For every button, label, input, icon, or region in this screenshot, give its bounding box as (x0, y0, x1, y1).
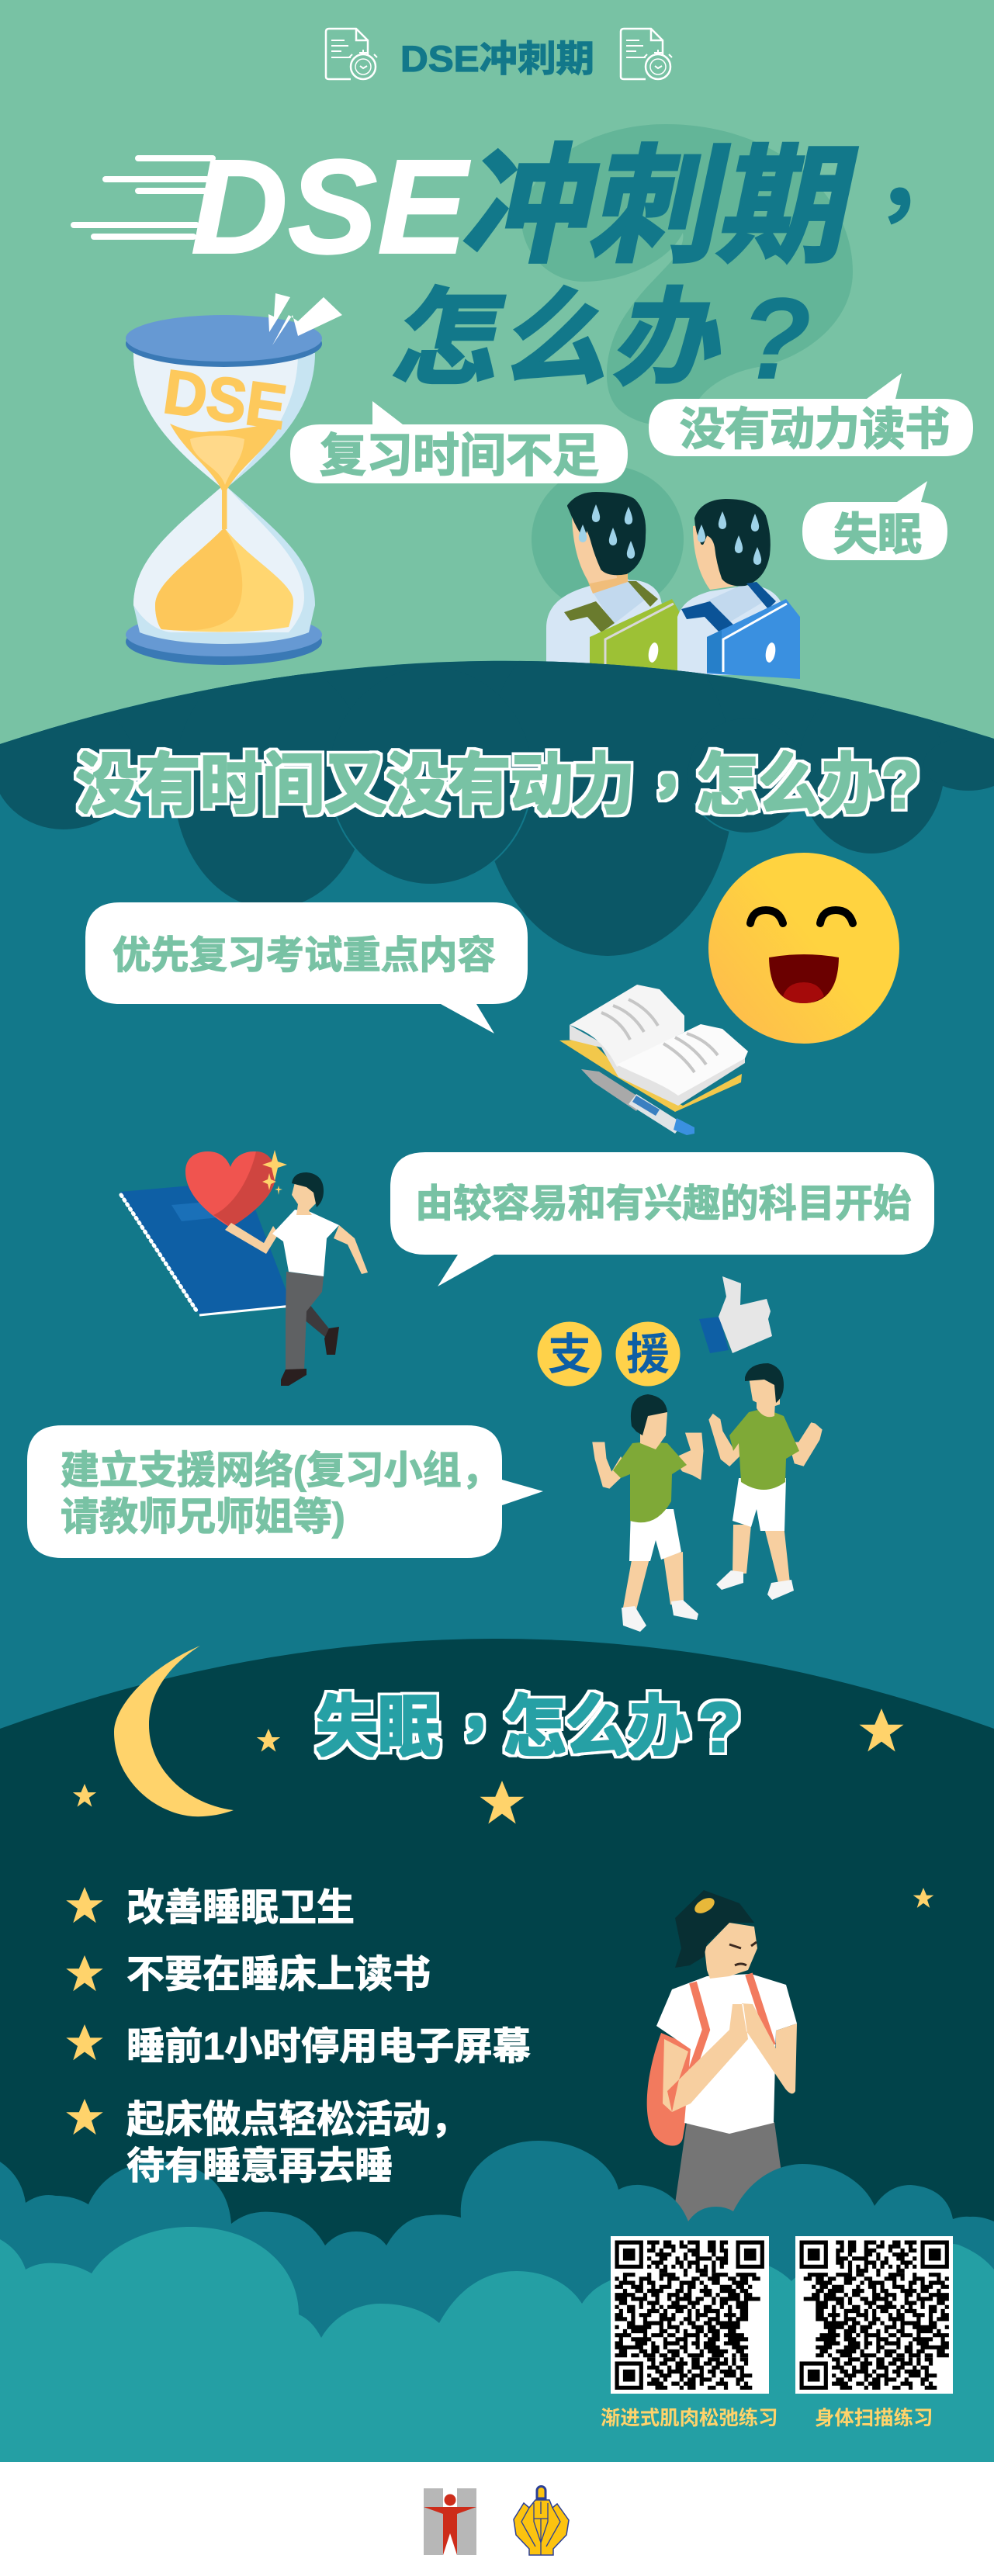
notebook (120, 1181, 292, 1315)
main title (74, 123, 970, 403)
tip four (66, 2099, 469, 2187)
section heading: no time and no motivation: ， (650, 734, 712, 803)
title line one: 冲刺期 (453, 136, 868, 279)
title comma: ， (872, 123, 970, 232)
icon: document with stopwatch right (621, 29, 672, 79)
section heading: insomnia: 失眠 (316, 1690, 440, 1764)
speed lines (74, 158, 213, 237)
panel: top header background (0, 0, 994, 776)
tip two: 不要在睡床上读书 (126, 1954, 431, 1996)
insomnia tips list (66, 1887, 531, 2187)
title line two: 怎么办 (386, 279, 743, 397)
illustration: man carrying heart and notebook (120, 1150, 368, 1386)
header label (326, 29, 672, 79)
section heading: no time and no motivation: 怎么办? (697, 748, 920, 822)
bubble: build support network: 请教师兄师姐等) (61, 1495, 345, 1539)
pen (581, 1069, 694, 1135)
section heading: insomnia: ? (698, 1689, 741, 1767)
panel: dark night section (0, 1639, 994, 2467)
skirt (675, 2122, 781, 2235)
support badges (537, 1322, 680, 1386)
bubble: start with easy and interesting subjects (390, 1152, 934, 1286)
man figure (225, 1172, 368, 1386)
boy left (594, 1394, 702, 1632)
icon: lightning crack (268, 293, 342, 345)
bubble: not enough revision time (290, 401, 628, 483)
panel: white footer (0, 2462, 994, 2576)
header text: DSE冲刺期 (400, 38, 594, 79)
icon: crescent moon (114, 1646, 234, 1816)
hourglass top sand (170, 421, 282, 490)
arms and hands (663, 2003, 797, 2112)
panel: teal section background (0, 661, 994, 1785)
students (532, 466, 800, 679)
QR code: body scan (795, 2236, 953, 2394)
bubble: no motivation to study: 没有动力读书 (680, 404, 950, 455)
hourglass glass (133, 353, 315, 644)
sparkle stars (262, 1150, 287, 1195)
tip one: 改善睡眠卫生 (126, 1887, 355, 1929)
bubble: build support network: 建立支援网络(复习小组， (61, 1449, 500, 1492)
circle behind students (532, 466, 684, 613)
student left (546, 493, 684, 675)
badge 支: 支 (548, 1330, 591, 1379)
section heading: insomnia (316, 1676, 741, 1767)
icon: happy face (708, 853, 899, 1044)
bubble: insomnia: 失眠 (833, 510, 922, 559)
boy right (710, 1363, 821, 1600)
falling sand stream (222, 486, 227, 529)
tip four: 待有睡意再去睡 (126, 2145, 393, 2187)
bottom clouds back layer (0, 2141, 994, 2467)
hourglass bottom cap (126, 613, 322, 665)
badge 援 (616, 1322, 680, 1386)
icon: document with stopwatch left (326, 29, 377, 79)
section heading: insomnia: ， (458, 1676, 520, 1745)
badge 援: 援 (626, 1330, 670, 1379)
bottom clouds front layer (0, 2227, 994, 2467)
hair tie (692, 1895, 717, 1916)
icon: thumbs up (699, 1276, 772, 1353)
bubble: prioritise exam content (85, 902, 528, 1034)
bubble: start with easy and interesting subjects: 由较容易和有兴趣的科目开始 (415, 1182, 911, 1225)
bubble: not enough revision time: 复习时间不足 (320, 430, 599, 482)
QR caption two: 身体扫描练习 (815, 2408, 933, 2429)
logo: hands holding person (514, 2486, 569, 2555)
hourglass (126, 293, 342, 665)
face (705, 1923, 757, 1979)
decorative blob behind title (521, 124, 853, 424)
title question mark: ? (740, 273, 812, 403)
tip three: 睡前1小时停用电子屏幕 (126, 2026, 531, 2068)
bubble: prioritise exam content: 优先复习考试重点内容 (113, 934, 496, 977)
illustration: two students cheering (594, 1363, 821, 1632)
bubble: insomnia (802, 481, 947, 560)
backpack (647, 2033, 698, 2146)
hourglass DSE label: DSE (160, 357, 290, 442)
heart (185, 1151, 275, 1227)
badge 支 (537, 1322, 602, 1386)
hourglass bottom sand (155, 528, 293, 632)
section heading: no time and no motivation: 没有时间又没有动力 (76, 748, 635, 822)
title DSE: DSE (191, 131, 470, 282)
QR code: progressive muscle relaxation (611, 2236, 769, 2394)
decorative stars (73, 1709, 933, 1908)
bubble: build support network (27, 1425, 543, 1558)
thin cloud outlines (335, 803, 792, 885)
section heading: insomnia: 怎么办 (504, 1690, 690, 1764)
bubble: no motivation to study (649, 373, 973, 456)
dark hill with hanging clouds (0, 661, 994, 956)
hourglass top cap (126, 315, 322, 367)
section heading: no time and no motivation (76, 734, 920, 822)
QR caption one: 渐进式肌肉松弛练习 (601, 2408, 778, 2429)
tip four: 起床做点轻松活动， (126, 2099, 469, 2141)
illustration: worried girl (647, 1890, 797, 2235)
facial features (729, 1942, 757, 1965)
student right (677, 500, 800, 679)
hair (675, 1890, 754, 1968)
logo: red figure on grey columns (424, 2488, 476, 2555)
shirt (656, 1974, 797, 2134)
icon: open book and pen (559, 985, 748, 1135)
backpack straps (692, 1974, 772, 2070)
